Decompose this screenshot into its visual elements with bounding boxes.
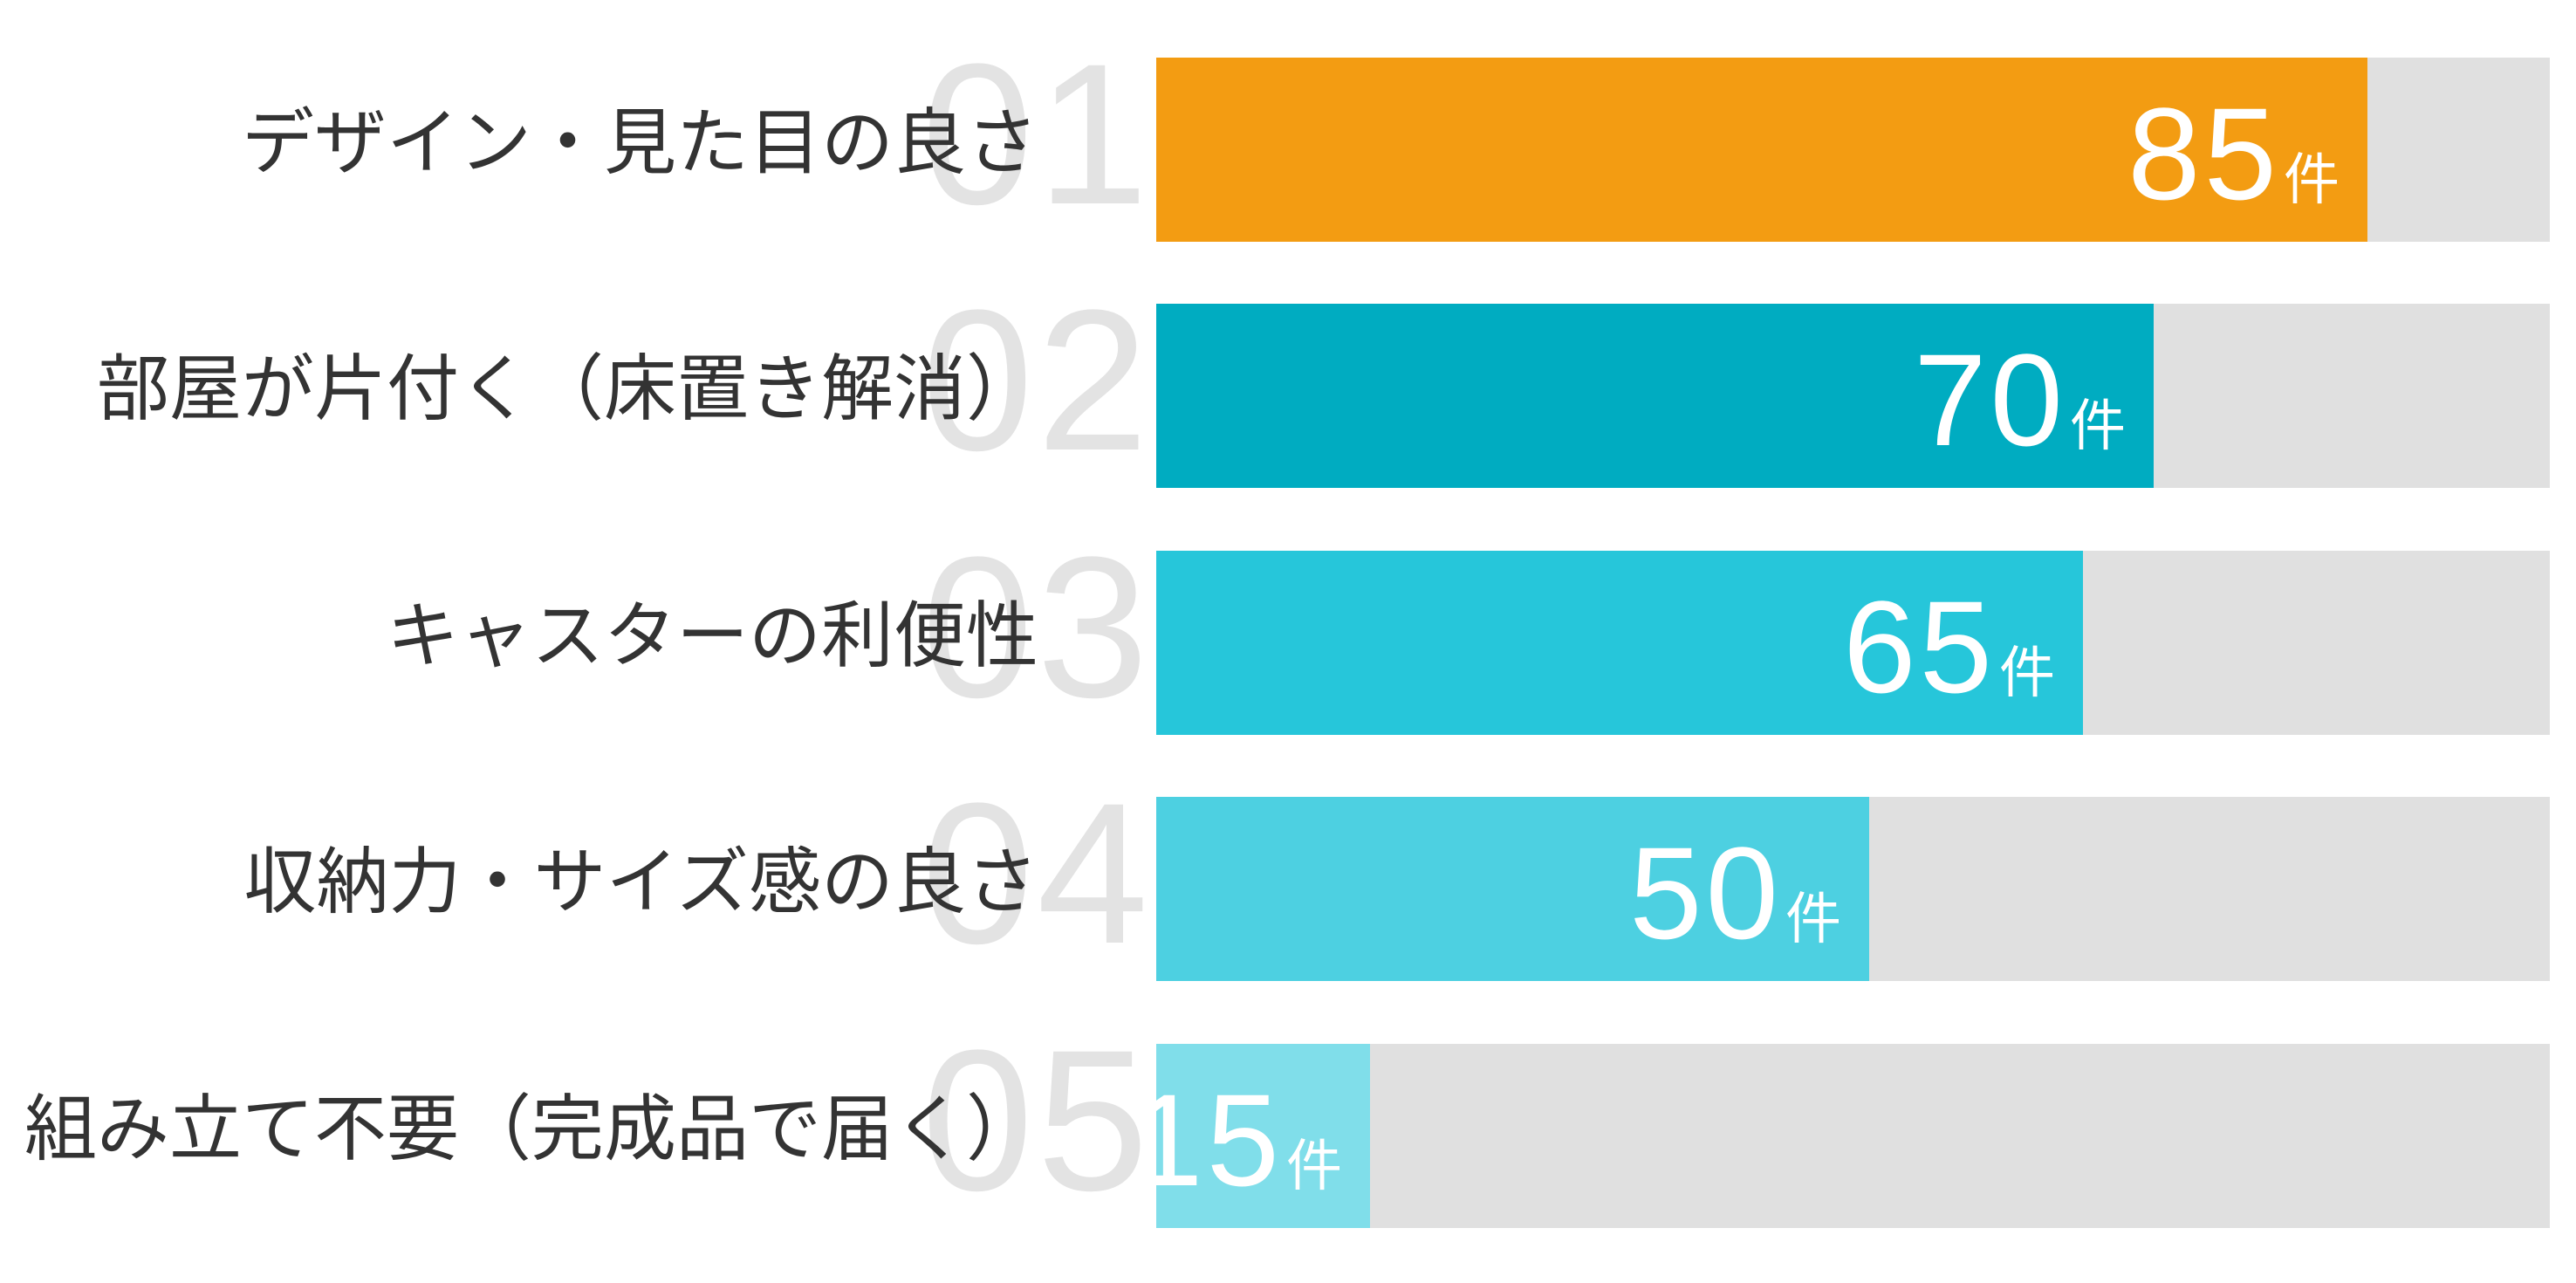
bar 01: 件	[2284, 148, 2340, 211]
bar 03	[1156, 551, 2550, 735]
bar 03: 件	[1999, 642, 2055, 704]
bar 03: 65	[1843, 573, 1996, 720]
bar 02: 70	[1914, 326, 2066, 473]
bar 01: 85	[2127, 80, 2280, 227]
bar 04	[1156, 797, 2550, 981]
bar 05: 15	[1130, 1067, 1283, 1213]
row 03	[387, 515, 2550, 739]
bar 05: 件	[1286, 1135, 1342, 1197]
label 04: 収納力・サイズ感の良さ	[243, 841, 1038, 923]
label 03: キャスターの利便性	[387, 595, 1038, 676]
row 04	[243, 761, 2550, 985]
row 01	[242, 22, 2550, 246]
rank number 05: 05	[921, 1008, 1152, 1232]
rank number 02: 02	[921, 268, 1152, 492]
bar 02: 件	[2070, 395, 2126, 457]
rank number 03: 03	[921, 515, 1152, 739]
label 01: デザイン・見た目の良さ	[242, 102, 1038, 183]
rank number 04: 04	[921, 761, 1152, 985]
row 02	[97, 268, 2550, 492]
bar 05	[1156, 1044, 2550, 1228]
bar 04: 件	[1785, 888, 1841, 950]
label 05: 組み立て不要（完成品で届く）	[24, 1088, 1038, 1170]
bar 02	[1156, 304, 2550, 488]
row 05	[24, 1008, 2550, 1232]
bar 04: 50	[1629, 820, 1782, 966]
rank number 01: 01	[921, 22, 1152, 246]
label 02: 部屋が片付く（床置き解消）	[97, 348, 1038, 429]
bar 01	[1156, 58, 2550, 242]
